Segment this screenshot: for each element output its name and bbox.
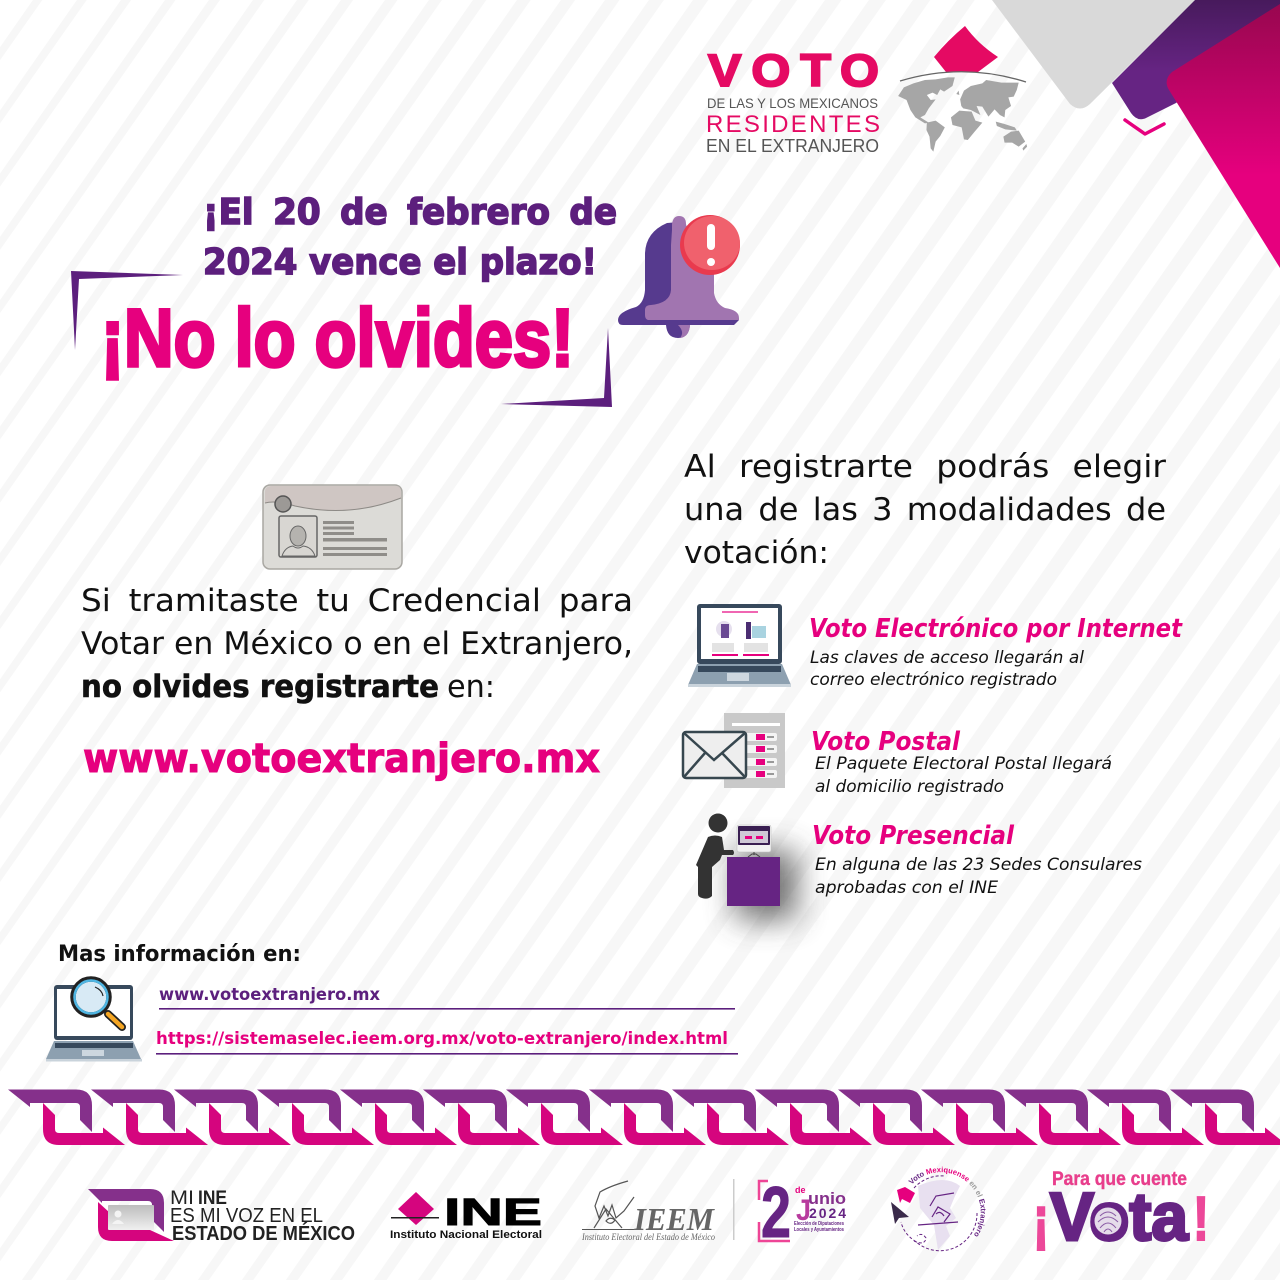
heading: mas informacion: Mas información en: — [58, 942, 301, 967]
icon: envelope and ballot — [683, 713, 785, 788]
text: credencial — [81, 583, 633, 705]
logo: 2 de junio 2024: Elección de Diputaciones — [794, 1221, 844, 1227]
heading: deadline: ¡El 20 de febrero de — [203, 192, 617, 233]
logo: mi ine — [88, 1188, 355, 1245]
text: voto postal: Voto Postal — [811, 727, 961, 757]
text: voto presencial: Voto Presencial — [812, 821, 1015, 851]
corner geometric shapes — [992, 0, 1280, 268]
logo: 2 de junio 2024: J — [796, 1194, 811, 1227]
logo: ieem — [581, 1181, 715, 1242]
icon: laptop electronic vote — [688, 604, 791, 687]
logo: voto mexiquense en el extranjero — [891, 1166, 986, 1252]
logo: para que cuente vota: Para que cuente — [1052, 1169, 1187, 1190]
text: voto postal: al domicilio registrado — [815, 777, 1004, 797]
logo: mi ine: INE — [198, 1188, 227, 1209]
text: voto presencial: aprobadas con el INE — [815, 878, 998, 898]
text: credencial: Si tramitaste tu Credencial para — [81, 583, 633, 619]
heading: deadline — [203, 192, 617, 283]
text: voto electronico — [809, 614, 1183, 690]
text: credencial: no olvides registrarte — [81, 669, 439, 705]
text: voto postal: El Paquete Electoral Postal llegará — [815, 754, 1112, 774]
icon: bell with alert — [618, 215, 740, 338]
text: credencial: en: — [447, 669, 495, 705]
logo: mi ine: ESTADO DE MÉXICO — [172, 1222, 355, 1245]
chain band — [8, 1090, 1280, 1145]
text: voto electronico: Las claves de acceso llegarán al — [810, 648, 1084, 668]
text: modalidades intro: una de las 3 modalidades de — [684, 492, 1166, 528]
logo: ine — [390, 1192, 542, 1241]
logo: voto residentes en el extranjero: EN EL EXTRANJERO — [706, 136, 879, 156]
logo: mi ine: MI — [170, 1188, 194, 1209]
logo: 2 de junio 2024 — [759, 1173, 846, 1253]
logo: mi ine: ES MI VOZ EN EL — [170, 1205, 323, 1227]
logo: 2 de junio 2024: Locales y Ayuntamientos — [794, 1227, 844, 1233]
logo: 2 de junio 2024: 2024 — [809, 1205, 846, 1221]
text: credencial: Votar en México o en el Extranjero, — [81, 626, 633, 662]
icon: id card — [263, 485, 402, 569]
text: voto postal — [811, 727, 1112, 797]
logo: ieem: IEEM — [633, 1201, 715, 1237]
logo: ieem: Instituto Electoral del Estado de México — [581, 1232, 715, 1242]
icon: laptop with magnifier — [46, 979, 142, 1062]
heading: deadline: 2024 vence el plazo! — [203, 242, 597, 283]
logo: voto residentes en el extranjero: RESIDENTES — [706, 111, 880, 138]
icon: ballot over world map — [898, 26, 1027, 152]
logo: voto residentes en el extranjero: DE LAS Y LOS MEXICANOS — [707, 95, 878, 111]
logo: 2 de junio 2024: unio — [808, 1189, 846, 1208]
text: modalidades intro: votación: — [684, 535, 829, 571]
logo: 2 de junio 2024: de — [795, 1185, 806, 1195]
text: modalidades intro — [684, 449, 1166, 571]
logo: para que cuente vota: ! — [1193, 1185, 1209, 1254]
text: voto presencial: En alguna de las 23 Sedes Consulares — [815, 855, 1142, 875]
logo: para que cuente vota: ¡ — [1033, 1185, 1049, 1254]
logo: ine: Instituto Nacional Electoral — [390, 1229, 542, 1241]
logo: ine: INE — [444, 1192, 542, 1234]
url: voto extranjero: www.votoextranjero.mx — [83, 736, 600, 782]
link: voto extranjero: www.votoextranjero.mx — [159, 985, 380, 1005]
heading: no lo olvides: No lo olvides! — [124, 293, 574, 384]
icon: person at voting booth — [696, 814, 797, 920]
divider — [733, 1179, 734, 1240]
link: ieem voto extranjero: https://sistemaselec.ieem.org.mx/voto-extranjero/index.html — [156, 1029, 728, 1049]
logo: para que cuente vota: Vota — [1050, 1179, 1189, 1255]
text: voto electronico: Voto Electrónico por Internet — [809, 614, 1183, 644]
logo: voto residentes en el extranjero — [706, 45, 889, 156]
logo: voto mexiquense en el extranjero: Voto Mexiquense en el Extranjero — [908, 1166, 986, 1236]
text: voto presencial — [812, 821, 1142, 898]
text: voto electronico: correo electrónico registrado — [810, 670, 1057, 690]
heading: no lo olvides: ¡ — [101, 293, 124, 384]
text: modalidades intro: Al registrarte podrás elegir — [684, 449, 1166, 485]
bracket corners — [71, 271, 612, 407]
logo: voto residentes en el extranjero: VOTO — [708, 45, 889, 96]
logo: 2 de junio 2024: 2 — [761, 1173, 791, 1253]
